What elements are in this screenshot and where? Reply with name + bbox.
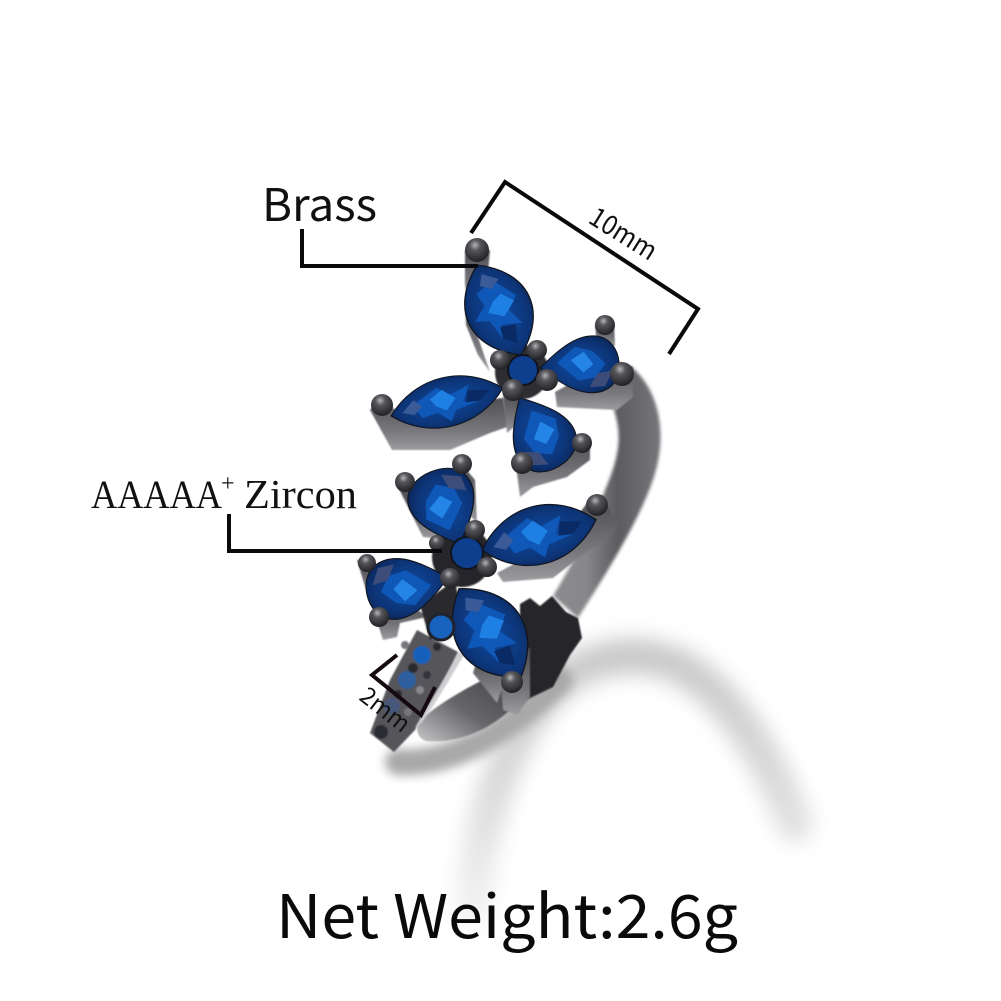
ring shadow	[398, 657, 795, 905]
upper flower	[370, 238, 634, 497]
stone: top marquise	[447, 251, 551, 369]
label: AAAAA+ Zircon: +	[221, 471, 235, 497]
leader line: Brass	[302, 229, 478, 266]
stone: right pear	[538, 334, 621, 396]
heading: Brass label: Brass	[262, 169, 377, 234]
stone: bottom pear	[492, 382, 586, 482]
leader line: Zircon	[229, 514, 442, 551]
prongs	[358, 454, 608, 693]
dark inner band	[520, 596, 582, 700]
label: AAAAA+ Zircon: AAAAA	[91, 472, 222, 517]
label: AAAAA+ Zircon: Zircon	[244, 471, 357, 517]
stone: small band stone	[428, 614, 454, 640]
ring band	[370, 366, 661, 752]
label: AAAAA+ Zircon	[91, 471, 357, 517]
upper band	[553, 366, 661, 618]
stone: left marquise	[385, 364, 509, 440]
metal settings	[370, 250, 633, 497]
dimension label: 2mm: 2mm	[354, 677, 419, 739]
dimension bracket: 2mm	[372, 655, 435, 715]
pave band with stones	[370, 630, 464, 752]
stone: centre	[451, 537, 483, 569]
dimension label: 10mm: 10mm	[583, 196, 666, 268]
stone: right marquise	[474, 492, 604, 578]
dimension bracket: 10mm	[471, 182, 698, 354]
prongs	[371, 238, 634, 474]
metal settings	[357, 462, 618, 715]
lower flower	[357, 454, 618, 715]
stone: left pear	[361, 548, 454, 624]
stone: top pear	[400, 459, 491, 557]
lower band	[417, 670, 520, 741]
net weight caption: Net Weight:2.6g	[276, 869, 738, 956]
stone: centre	[508, 355, 538, 385]
stone: bottom marquise	[431, 569, 549, 697]
